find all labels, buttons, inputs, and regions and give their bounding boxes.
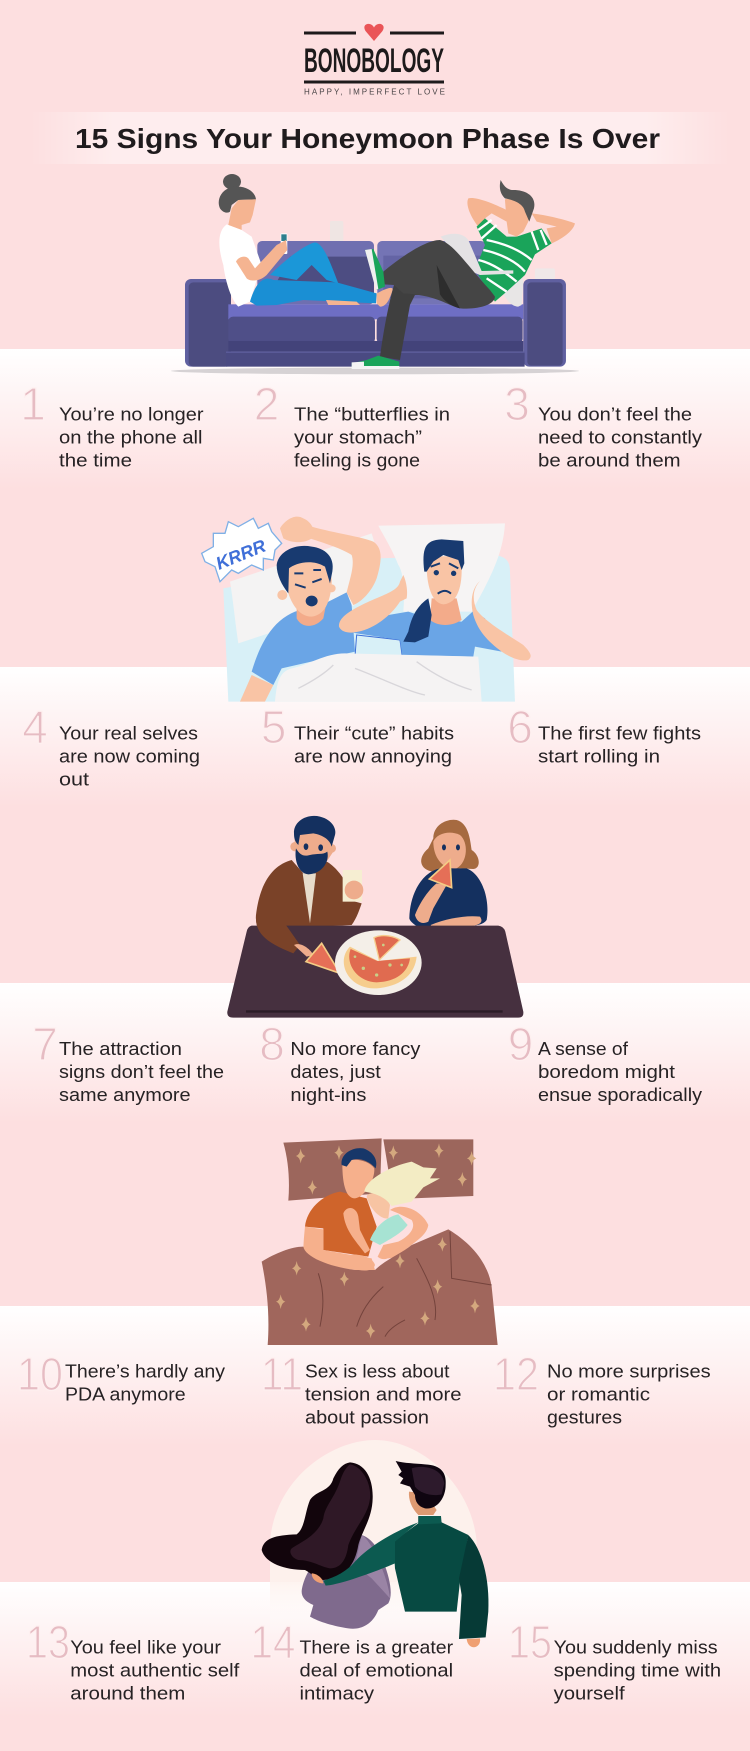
text 3: be around them — [538, 450, 681, 470]
man — [352, 180, 575, 369]
text 4: are now coming — [59, 746, 200, 766]
text 4: out — [59, 770, 89, 790]
text 7: same anymore — [59, 1085, 191, 1105]
text 5 — [294, 724, 454, 766]
text 1: on the phone all — [59, 428, 202, 448]
man sleeve and slice — [256, 915, 340, 973]
sign 2 — [254, 378, 450, 470]
text 15 — [554, 1637, 721, 1703]
text 14: intimacy — [300, 1683, 374, 1703]
number 10: 10 — [17, 1348, 63, 1400]
text 4 — [59, 724, 200, 790]
text 13 — [70, 1637, 240, 1703]
text 12: gestures — [547, 1408, 622, 1428]
number 5: 5 — [261, 701, 286, 753]
sheet — [275, 653, 482, 702]
sign 5 — [261, 701, 454, 766]
text 6: start rolling in — [538, 746, 660, 766]
logo: Bonobology — [304, 24, 445, 96]
text 14: deal of emotional — [300, 1660, 453, 1680]
number 8: 8 — [259, 1018, 285, 1070]
woman with pizza slice — [409, 820, 487, 929]
text 8: dates, just — [290, 1062, 381, 1082]
text 11: Sex is less about — [305, 1362, 450, 1382]
text 9: ensue sporadically — [538, 1085, 702, 1105]
number 15: 15 — [508, 1616, 552, 1668]
text 12: No more surprises — [547, 1362, 711, 1382]
text 14: There is a greater — [300, 1637, 453, 1657]
sign 3 — [504, 378, 702, 470]
man arm — [323, 1522, 418, 1586]
text 5: are now annoying — [294, 746, 452, 766]
bubble: KRRR: KRRR — [213, 536, 269, 574]
sign 11 — [261, 1348, 462, 1428]
text 3: need to constantly — [538, 428, 702, 448]
illustration: couple eating pizza — [227, 816, 523, 1018]
pillows — [283, 1138, 476, 1201]
table — [227, 926, 523, 1018]
sign 9 — [508, 1018, 702, 1105]
text 11: tension and more — [305, 1385, 462, 1405]
number 4: 4 — [22, 701, 48, 753]
woman — [219, 174, 393, 307]
title: 15 Signs Your Honeymoon Phase Is Over — [75, 123, 660, 154]
bed — [223, 555, 515, 702]
woman — [364, 1162, 440, 1258]
man with beard — [256, 816, 363, 953]
number 13: 13 — [26, 1616, 70, 1668]
pillows — [230, 523, 505, 643]
sign 1 — [20, 378, 204, 470]
sign 10 — [17, 1348, 225, 1405]
woman covering ears — [339, 539, 531, 660]
number 1: 1 — [20, 378, 46, 430]
woman hair — [262, 1462, 373, 1583]
plant pot — [535, 268, 555, 280]
bubble: KRRR — [202, 518, 282, 582]
sign 4 — [22, 701, 200, 790]
text 7 — [59, 1039, 224, 1105]
text 12: or romantic — [547, 1385, 650, 1405]
text 8 — [290, 1039, 420, 1105]
number 6: 6 — [507, 701, 533, 753]
text 5: Their “cute” habits — [294, 724, 454, 744]
text 14 — [300, 1637, 453, 1703]
text 10: There’s hardly any — [65, 1362, 225, 1382]
text 13: You feel like your — [70, 1637, 221, 1657]
text 13: around them — [70, 1683, 185, 1703]
text 9: A sense of — [538, 1039, 629, 1059]
shadow — [171, 368, 579, 374]
number 9: 9 — [508, 1018, 533, 1070]
man body — [393, 1461, 489, 1647]
illustration: couple on sofa — [171, 174, 579, 374]
title band — [30, 112, 730, 164]
text 3 — [538, 404, 702, 470]
woman jacket — [302, 1535, 391, 1629]
text 15: yourself — [554, 1683, 626, 1703]
hands — [350, 1243, 398, 1271]
number 7: 7 — [32, 1018, 58, 1070]
illustration: couple seen from behind — [262, 1440, 489, 1647]
text 7: The attraction — [59, 1039, 182, 1059]
text 2: feeling is gone — [294, 450, 420, 470]
text 10 — [65, 1362, 225, 1405]
text 1: You’re no longer — [59, 404, 204, 424]
number 11: 11 — [261, 1348, 303, 1400]
text 15: You suddenly miss — [554, 1637, 718, 1657]
logo: Bonobology: BONOBOLOGY — [304, 42, 444, 80]
illustration: snoring couple in bed — [202, 517, 531, 702]
text 9: boredom might — [538, 1062, 675, 1082]
sign 7 — [32, 1018, 224, 1105]
pizza plate — [335, 930, 422, 995]
text 13: most authentic self — [70, 1660, 240, 1680]
sign 15 — [508, 1616, 721, 1703]
number 3: 3 — [504, 378, 530, 430]
text 2 — [294, 404, 450, 470]
text 8: night-ins — [290, 1085, 366, 1105]
number 12: 12 — [493, 1348, 539, 1400]
sign 6 — [507, 701, 701, 766]
text 10: PDA anymore — [65, 1385, 186, 1405]
text 7: signs don’t feel the — [59, 1062, 224, 1082]
man snoring — [240, 517, 381, 702]
sign 8 — [259, 1018, 420, 1105]
logo: Bonobology: HAPPY, IMPERFECT LOVE — [304, 88, 445, 96]
text 11: about passion — [305, 1408, 429, 1428]
text 12 — [547, 1362, 711, 1428]
text 4: Your real selves — [59, 724, 198, 744]
text 2: your stomach” — [294, 428, 422, 448]
text 6 — [538, 724, 701, 766]
sign 14 — [250, 1616, 453, 1703]
vase — [330, 221, 343, 242]
sign 12 — [493, 1348, 711, 1428]
illustration: couple cuddling in bed — [262, 1138, 498, 1345]
text 8: No more fancy — [290, 1039, 420, 1059]
text 9 — [538, 1039, 702, 1105]
text 6: The first few fights — [538, 724, 701, 744]
text 11 — [305, 1362, 462, 1428]
text 1 — [59, 404, 204, 470]
text 2: The “butterflies in — [294, 404, 450, 424]
sign 13 — [26, 1616, 240, 1703]
man — [303, 1148, 377, 1270]
number 14: 14 — [250, 1616, 296, 1668]
text 3: You don’t feel the — [538, 404, 692, 424]
sofa — [185, 241, 566, 367]
number 2: 2 — [254, 378, 279, 430]
text 15: spending time with — [554, 1660, 721, 1680]
duvet — [262, 1229, 498, 1345]
text 1: the time — [59, 450, 132, 470]
icon: heart — [364, 24, 384, 41]
arch backdrop — [270, 1440, 477, 1635]
